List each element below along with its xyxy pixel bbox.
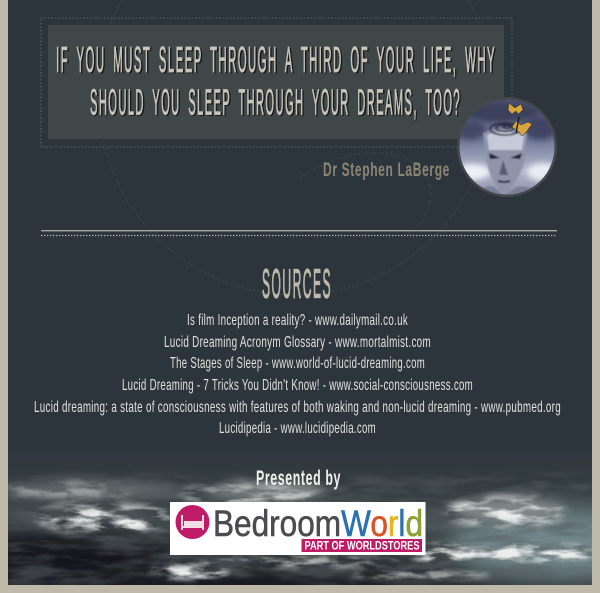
faint dotted background circles xyxy=(98,0,492,295)
logo tagline: PART OF WORLDSTORES xyxy=(304,538,420,552)
sources list: Lucid Dreaming Acronym Glossary - www.mortalmist.com xyxy=(164,334,431,351)
divider rules xyxy=(41,230,557,236)
icon: bed xyxy=(176,505,210,539)
portrait of Dr Stephen LaBerge xyxy=(454,97,559,197)
icon: butterflies xyxy=(508,103,532,136)
quote text xyxy=(56,39,496,122)
logo: Bedroom World xyxy=(170,502,426,555)
sources list: The Stages of Sleep - www.world-of-lucid-dreaming.com xyxy=(170,355,425,372)
sources list xyxy=(34,312,561,437)
infographic footer panel: SOURCES xyxy=(262,260,332,306)
sources list: Lucidipedia - www.lucidipedia.com xyxy=(219,420,376,437)
logo wordmark: BedroomWorld xyxy=(213,503,423,544)
sources list: Is film Inception a reality? - www.dailymail.co.uk xyxy=(187,312,408,329)
quote attribution: Dr Stephen LaBerge xyxy=(323,160,450,181)
presented by label: Presented by xyxy=(256,467,341,490)
cloudy sky background xyxy=(8,470,592,585)
quote box xyxy=(41,18,512,147)
